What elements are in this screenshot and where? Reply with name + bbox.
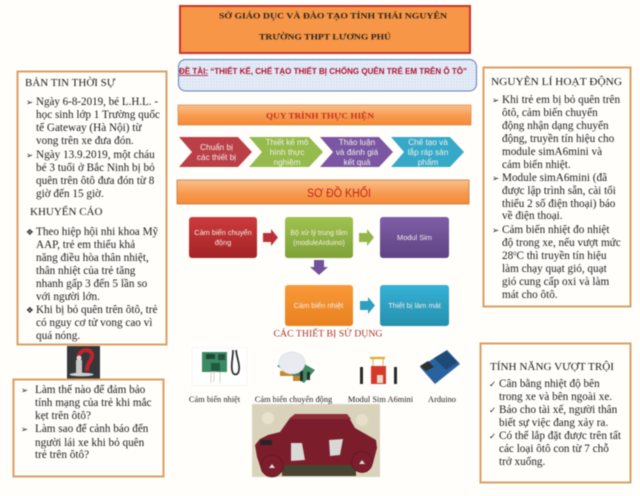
text block: feature items: Báo cho tài xế, người thân (499, 404, 618, 416)
text block: news items (26, 96, 160, 200)
text block: principle items: gió cung cấp oxi và làm (502, 276, 609, 288)
chevron: step 2: hình thực (270, 148, 304, 157)
text block: feature items: ✓ (489, 406, 496, 416)
text block: principle items: mát cho ôtô. (502, 289, 558, 301)
text block: advice items: ❖ (26, 228, 34, 238)
topic box (178, 60, 476, 91)
text block: principle items: cảm biến nhiệt. (502, 159, 571, 171)
device labels: Cảm biến nhiệt (189, 395, 241, 404)
text block: principle items: ôtô, cảm biến chuyển (502, 107, 598, 119)
text block: advice items: Theo hiệp hội nhi khoa Mỹ (36, 226, 159, 238)
text block: principle items: ➢ (492, 96, 499, 106)
panel: questions: Làm thế nào để đảm bảo (35, 384, 146, 396)
text block: feature items: Có thể lắp đặt được trên tất (499, 430, 622, 442)
text block: feature items: trở xuống. (499, 456, 546, 468)
panel: questions (14, 380, 164, 476)
chevron: step 4: lắp ráp sản (408, 147, 449, 157)
arrow: green (359, 229, 374, 246)
chevron: step 1: các thiết bị (197, 153, 236, 162)
block: SIM module: Modul Sim (397, 233, 432, 242)
text block: principle items: thiểu 2 số điện thoại) báo (502, 198, 616, 210)
heading: news: BẢN TIN THỜI SỰ (25, 77, 116, 89)
chevron: step 3 (320, 137, 393, 167)
chevron: step 4 (391, 137, 464, 167)
block: central processor: Bộ xử lý trung tâm (290, 229, 348, 237)
text block: advice items: nhanh gấp 3 đến 5 lần so (36, 278, 148, 290)
device: motion sensor image (277, 352, 315, 383)
text block: feature items: các loại ôtô con từ 7 chỗ (499, 443, 609, 455)
device: SIM module image (360, 358, 397, 384)
text block: news items: tế Gateway (Hà Nội) từ (36, 122, 142, 134)
text block: principle items: động, truyền tín hiệu cho (502, 133, 615, 145)
heading: operating principle: NGUYÊN LÍ HOẠT ĐỘNG (491, 76, 622, 88)
block: cooling device (380, 285, 449, 326)
text block: principle items: Khi trẻ em bị bỏ quên trên (502, 94, 620, 106)
text block: advice items: với người lớn. (36, 291, 100, 303)
heading: outstanding features: TÍNH NĂNG VƯỢT TRỘI (490, 361, 614, 373)
device labels: Modul Sim A6mini (348, 395, 414, 404)
text block: advice items: AAP, trẻ em thiếu khả (36, 239, 135, 251)
text block: principle items: 28 (502, 250, 513, 262)
text block: advice items: ❖ (26, 306, 34, 316)
text block: principle items: Module simA6mini (đã (502, 172, 607, 184)
chevron: step 2: Thiết kế mô (266, 138, 309, 147)
topic box: ĐỀ TÀI: “THIẾT KẾ, CHẾ TẠO THIẾT BỊ CHỐNG QUÊN TRẺ EM TRÊN Ô TÔ” (179, 65, 467, 76)
heading bar: process: QUY TRÌNH THỰC HIỆN (266, 110, 375, 120)
panel: operating principle (484, 68, 630, 306)
chevron: step 3: và đánh giá (336, 148, 379, 157)
arrow: blue (360, 297, 375, 314)
text block: principle items: module simA6mini và (502, 146, 602, 158)
panel: questions: ➢ (21, 425, 28, 435)
text block: news items: học sinh lớp 1 Trường quốc (36, 109, 160, 121)
heading: advice: KHUYẾN CÁO (30, 205, 102, 218)
text block: advice items: năng điều hòa thân nhiệt, (36, 252, 149, 264)
text block: principle items (492, 94, 621, 301)
text block: principle items: ➢ (492, 174, 499, 184)
panel: questions: người lái xe khi bỏ quên (35, 437, 145, 449)
text block: principle items: ➢ (492, 226, 499, 236)
block: temperature sensor: Cảm biến nhiệt (294, 301, 343, 310)
chevron: step 3: Thảo luận (339, 138, 376, 147)
chevron: step 4: phẩm (418, 157, 438, 167)
text block: advice items: Khi bị bỏ quên trên ôtô, trẻ (36, 304, 158, 316)
device: Arduino image (420, 350, 460, 384)
device: temperature sensor image (192, 348, 247, 386)
block: temperature sensor (285, 285, 353, 326)
block: cooling device: Thiết bị làm mát (388, 301, 441, 310)
text block: principle items: được lập trình sẵn, cài tối (502, 185, 616, 197)
text block: feature items (489, 378, 622, 468)
text block: news items: quên trên ôtô đưa đón từ 8 (36, 175, 155, 187)
header: school name (180, 6, 470, 53)
panel: questions: tính mạng của trẻ khi mắc (35, 397, 152, 409)
device labels: Cảm biến chuyển động (255, 395, 333, 404)
block: motion sensor: động (215, 238, 231, 247)
block: motion sensor: Cảm biến chuyển (194, 228, 252, 237)
text block: advice items: thân nhiệt của trẻ tăng (36, 265, 136, 277)
text block: principle items: 0 (513, 250, 516, 258)
icon: question mark figure (67, 346, 100, 379)
chevron: step 2: nghiệm (274, 158, 301, 167)
device labels (189, 395, 456, 404)
text block: principle items: về điện thoại. (502, 210, 563, 222)
block: SIM module (380, 217, 449, 258)
process chevrons (179, 137, 464, 167)
panel: questions: trẻ trên ôtô? (35, 449, 89, 461)
panel: questions: ➢ (21, 386, 28, 396)
panel: news bulletin and advice (18, 72, 166, 344)
text block: news items: Ngày 6-8-2019, bé L.H.L. - (36, 96, 158, 108)
text block: advice items: quá nóng. (36, 330, 80, 342)
text block: news items: ➢ (26, 98, 33, 108)
heading bar: block diagram (177, 180, 469, 204)
text block: news items: bé 3 tuổi ở Bắc Ninh bị bỏ (36, 162, 155, 174)
arrow: red (263, 229, 278, 246)
text block: principle items: độ trong xe, nếu vượt mức (502, 237, 621, 249)
text block: principle items: Cảm biến nhiệt đo nhiệt (502, 224, 610, 236)
block diagram (189, 217, 449, 326)
panel: outstanding features (480, 344, 630, 482)
photo: car prototype (252, 404, 380, 477)
panel: questions: kẹt trên ôtô? (35, 410, 91, 422)
text block: principle items: làm chạy quạt gió, quạt (502, 263, 608, 275)
chevron: step 3: kết quả (344, 158, 371, 167)
panel: questions: Làm sao để cảnh báo đến (35, 423, 149, 435)
text block: news items: vong trên xe đưa đón. (36, 135, 134, 147)
text block: advice items (26, 226, 159, 342)
text block: news items: ➢ (26, 151, 33, 161)
text block: principle items: động nhận dạng chuyển (502, 120, 609, 132)
text block: feature items: ✓ (489, 432, 496, 442)
text block: feature items: ✓ (489, 380, 496, 390)
device labels: Arduino (428, 395, 456, 404)
arrow: purple down (310, 260, 328, 275)
text block: feature items: biết sự việc đang xảy ra. (499, 417, 608, 429)
heading bar: process (178, 105, 471, 125)
header: school name: SỞ GIÁO DỤC VÀ ĐÀO TẠO TỈNH THÁI NGUYÊN (219, 10, 448, 20)
chevron: step 1 (179, 137, 252, 167)
text block: feature items: Cân bằng nhiệt độ bên (499, 378, 600, 390)
text block: principle items: C thì truyền tín hiệu (516, 250, 607, 262)
text block: feature items: trong xe và bên ngoài xe. (499, 391, 612, 403)
chevron: step 4: Chế tạo và (408, 138, 448, 147)
block: motion sensor (189, 217, 257, 258)
text block: news items: giờ đến 15 giờ. (36, 188, 104, 200)
heading bar: block diagram: SƠ ĐỒ KHỐI (307, 186, 371, 200)
chevron: step 2 (249, 137, 323, 167)
block: central processor: (moduleArduino) (293, 240, 345, 247)
text block: advice items: có nguy cơ tử vong cao vì (36, 317, 152, 329)
chevron: step 1: Chuẩn bị (200, 142, 233, 152)
block: central processor (285, 217, 353, 258)
text block: news items: Ngày 13.9.2019, một cháu (36, 149, 155, 161)
header: school name: TRƯỜNG THPT LƯƠNG PHÚ (259, 32, 391, 42)
heading: devices used: CÁC THIẾT BỊ SỬ DỤNG (274, 326, 382, 340)
